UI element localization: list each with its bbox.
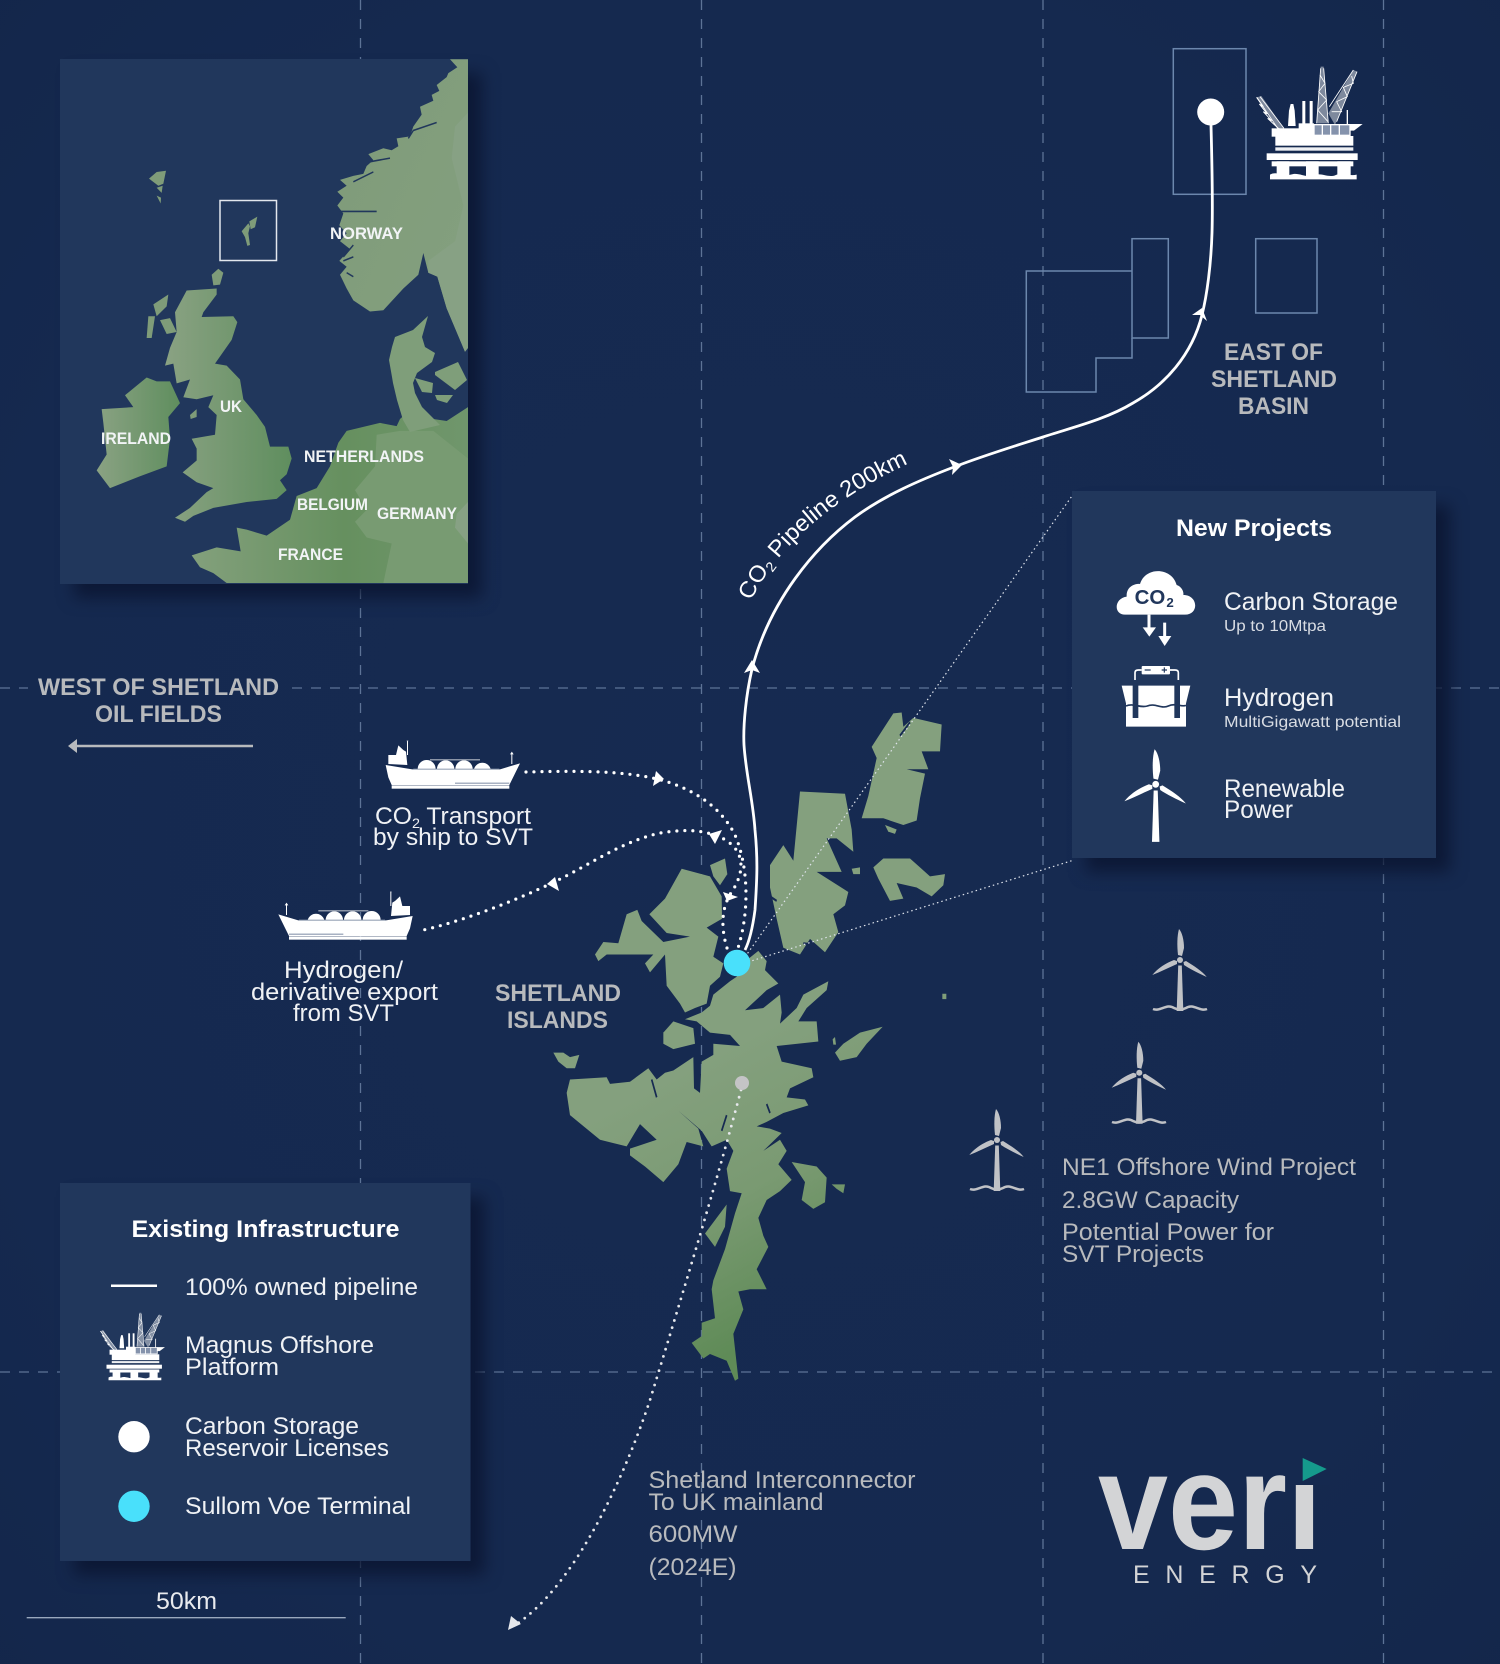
logo: Veri Energy: ENERGY	[1133, 1561, 1317, 1589]
text: Hydrogen	[1224, 684, 1401, 731]
text: NE1 offshore wind project: NE1 Offshore Wind Project	[1062, 1154, 1356, 1181]
icon: CO2 transport ship	[386, 741, 520, 789]
label: West of Shetland oil fields	[38, 674, 279, 728]
text: hydrogen export: Hydrogen/	[284, 957, 403, 984]
text: Shetland interconnector: 600MW	[648, 1521, 738, 1548]
label: East of Shetland Basin: SHETLAND	[1211, 366, 1337, 393]
map label: NETHERLANDS: NETHERLANDS	[304, 448, 424, 466]
label: East of Shetland Basin: BASIN	[1238, 393, 1309, 420]
land: continental Europe	[192, 407, 468, 583]
text: Renewable Power: Renewable	[1224, 775, 1345, 803]
map label: FRANCE: FRANCE	[278, 546, 343, 564]
icon: offshore turbine 3	[969, 1109, 1024, 1191]
icon: wind turbine	[1124, 749, 1186, 842]
text: NE1 offshore wind project: 2.8GW Capacity	[1062, 1187, 1239, 1214]
map: Shetland Islands	[553, 713, 946, 1381]
text: hydrogen export	[251, 957, 438, 1027]
marker: Sullom Voe Terminal	[724, 950, 750, 976]
text: Shetland interconnector: (2024E)	[648, 1554, 736, 1581]
text: CO2 transport: CO	[375, 803, 411, 830]
legend: pipeline: 100% owned pipeline	[185, 1274, 418, 1301]
icon: CO2 cloud: 2	[1166, 595, 1174, 610]
map label: GERMANY: GERMANY	[377, 505, 457, 523]
land: Norway and Sweden	[337, 59, 468, 352]
connector: thin dotted lines from terminal to new projects	[745, 496, 1074, 962]
text: NE1 offshore wind project	[1062, 1154, 1356, 1268]
legend: Sullom Voe Terminal: Sullom Voe Terminal	[185, 1493, 411, 1520]
icon: hydrogen electrolyser	[1122, 666, 1190, 727]
legend: carbon storage: Reservoir Licenses	[185, 1435, 389, 1462]
label: Shetland Islands: ISLANDS	[507, 1007, 608, 1034]
pipeline label: CO	[740, 565, 766, 598]
icon: CO2 cloud	[1117, 571, 1195, 646]
marker: carbon storage reservoir	[1197, 98, 1224, 126]
pipeline label: 2	[766, 562, 777, 572]
route: CO2 ship transport dotted	[526, 771, 746, 948]
text: Hydrogen: Hydrogen	[1224, 684, 1334, 712]
pipeline: CO2 200km	[744, 125, 1212, 950]
legend: platform	[100, 1313, 374, 1381]
text: Renewable Power	[1224, 775, 1345, 824]
text: Carbon Storage: Carbon Storage	[1224, 588, 1398, 616]
marker: interconnector landing	[735, 1076, 749, 1090]
text: NE1 offshore wind project: Potential Power for	[1062, 1219, 1274, 1246]
pipeline label	[740, 454, 907, 598]
text: CO2 transport: by ship to SVT	[373, 824, 533, 851]
pipeline label: Pipeline 200km	[767, 454, 907, 558]
text: CO2 transport	[373, 803, 533, 851]
legend: platform: Magnus Offshore	[185, 1332, 374, 1359]
heading: Existing Infrastructure: Existing Infrastructure	[132, 1216, 400, 1243]
text: CO2 transport: Transport	[420, 803, 531, 830]
route: hydrogen export dotted	[419, 830, 741, 948]
label: West of Shetland oil fields: WEST OF SHETLAND	[38, 674, 279, 701]
icon: Magnus platform	[1257, 67, 1363, 179]
legend: platform: Platform	[185, 1354, 279, 1381]
label: East of Shetland Basin	[1211, 339, 1337, 420]
land: Denmark	[389, 316, 467, 432]
text: hydrogen export: from SVT	[293, 1000, 394, 1027]
text: Hydrogen: MultiGigawatt potential	[1224, 714, 1401, 731]
icon: offshore turbine 1	[1152, 929, 1207, 1011]
arrow: towards west	[68, 739, 253, 753]
label: East of Shetland Basin: EAST OF	[1224, 339, 1323, 366]
panel: New Projects	[1072, 491, 1436, 858]
text: Renewable Power: Power	[1224, 796, 1293, 824]
reservoir licence blocks	[1026, 49, 1317, 392]
route: Shetland interconnector dotted	[508, 1090, 741, 1630]
land: Great Britain	[165, 289, 292, 522]
text: Carbon Storage	[1224, 588, 1398, 635]
panel: inset location map	[60, 59, 468, 584]
text: Shetland interconnector: Shetland Interconnector	[648, 1467, 916, 1494]
text: CO2 transport: 2	[412, 815, 420, 831]
label: Shetland Islands: SHETLAND	[495, 980, 621, 1007]
label: Shetland Islands	[495, 980, 621, 1034]
legend: carbon storage	[118, 1413, 389, 1462]
text: Shetland interconnector: To UK mainland	[648, 1489, 824, 1516]
text: Shetland interconnector	[648, 1467, 916, 1581]
legend: carbon storage: Carbon Storage	[185, 1413, 359, 1440]
legend: Sullom Voe Terminal	[118, 1491, 411, 1522]
inset: Shetland locator box	[220, 200, 276, 260]
icon: CO2 cloud: CO	[1135, 587, 1165, 609]
map label: UK: UK	[220, 398, 242, 416]
text: NE1 offshore wind project: SVT Projects	[1062, 1241, 1204, 1268]
map label: BELGIUM: BELGIUM	[297, 496, 368, 514]
panel: Existing Infrastructure legend	[60, 1183, 470, 1561]
map label: NORWAY: NORWAY	[330, 225, 403, 243]
text: hydrogen export: derivative export	[251, 979, 438, 1006]
heading: New Projects: New Projects	[1176, 515, 1332, 542]
logo: Veri Energy: veri	[1098, 1426, 1322, 1579]
map label: IRELAND: IRELAND	[101, 430, 171, 448]
text: Carbon Storage: Up to 10Mtpa	[1224, 618, 1326, 635]
label: West of Shetland oil fields: OIL FIELDS	[95, 701, 222, 728]
land: Ireland	[97, 377, 180, 488]
land: Scottish and northern islands	[147, 171, 257, 419]
scale bar: 50km	[156, 1588, 217, 1615]
icon: hydrogen export ship	[278, 892, 413, 940]
icon: offshore turbine 2	[1112, 1042, 1166, 1124]
